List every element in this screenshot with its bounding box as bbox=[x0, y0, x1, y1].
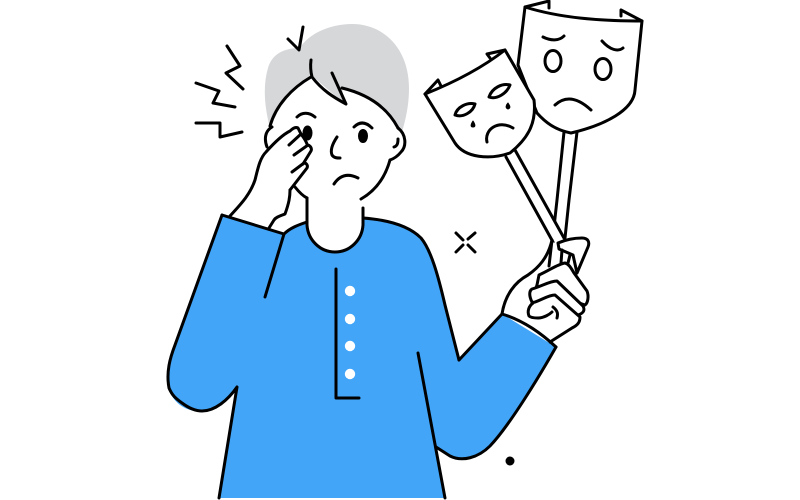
right cuff bbox=[502, 314, 556, 347]
small mask stick lines bbox=[506, 150, 564, 242]
neck and face bbox=[262, 60, 405, 225]
small eye left bbox=[455, 104, 475, 116]
button 1 bbox=[345, 286, 355, 296]
small mask bbox=[425, 50, 534, 157]
ring finger bbox=[290, 163, 307, 190]
button 2 bbox=[345, 314, 355, 324]
mouth bbox=[334, 175, 358, 184]
big mask stick bbox=[550, 132, 577, 263]
shirt outline bbox=[168, 215, 556, 498]
buttons bbox=[345, 286, 355, 379]
hand on face bbox=[230, 127, 312, 229]
shirt bbox=[168, 215, 556, 498]
right arm side fold bbox=[418, 353, 445, 498]
top finger bbox=[536, 263, 588, 305]
right arm bbox=[436, 314, 556, 459]
hand holding sticks bbox=[502, 238, 590, 343]
sparkle bbox=[456, 233, 475, 252]
hair bbox=[265, 24, 409, 132]
third finger and palm edge bbox=[532, 295, 580, 342]
mask mouth bbox=[555, 99, 591, 110]
head outline right bbox=[342, 88, 398, 128]
right eye bbox=[360, 130, 366, 142]
second finger bbox=[530, 281, 584, 315]
bottom finger bbox=[528, 303, 552, 318]
left eye bbox=[304, 127, 311, 139]
inner ear bbox=[394, 139, 398, 147]
back of hand bbox=[230, 128, 301, 216]
dot bbox=[506, 456, 514, 466]
small eye right bbox=[489, 85, 510, 98]
pain mark middle bbox=[196, 83, 235, 107]
big mask bbox=[518, 1, 642, 133]
cheek bbox=[295, 187, 307, 198]
left shoulder bbox=[284, 222, 307, 234]
right ear bbox=[390, 128, 405, 160]
nose bbox=[331, 137, 340, 158]
back of right hand bbox=[502, 240, 552, 314]
jaw bbox=[361, 160, 390, 199]
tear right bbox=[506, 103, 510, 109]
eye left bbox=[545, 50, 561, 72]
left sleeve and body bbox=[168, 215, 237, 498]
mask shape bbox=[518, 7, 642, 133]
palm bbox=[502, 240, 590, 343]
neckline bbox=[307, 198, 363, 252]
index finger bbox=[294, 145, 311, 164]
small mask shape bbox=[425, 50, 534, 157]
placket bbox=[336, 269, 359, 398]
left cuff bbox=[222, 215, 284, 297]
head outline left bbox=[270, 77, 311, 126]
pain mark bottom bbox=[196, 123, 242, 137]
button 4 bbox=[345, 369, 355, 379]
button 3 bbox=[345, 341, 355, 351]
left brow bbox=[297, 113, 315, 117]
pain mark top bbox=[226, 46, 243, 89]
crease bbox=[553, 307, 558, 318]
eye right bbox=[595, 58, 611, 80]
small mask stick bbox=[506, 150, 564, 242]
fringe bbox=[311, 60, 346, 104]
hand fill bbox=[230, 127, 312, 229]
brow left bbox=[543, 36, 564, 40]
face skin bbox=[262, 77, 405, 225]
brow right bbox=[602, 41, 623, 50]
fingertip joint bbox=[301, 134, 307, 144]
tabs bbox=[525, 1, 642, 21]
right shoulder and body bbox=[363, 218, 459, 360]
thumb bbox=[558, 238, 589, 273]
small mouth bbox=[487, 125, 513, 142]
left ear bbox=[265, 127, 272, 147]
hair tick bbox=[288, 27, 303, 50]
tear left bbox=[471, 121, 475, 127]
stick in hand bbox=[561, 250, 570, 263]
wrist bbox=[269, 190, 290, 228]
right brow bbox=[354, 123, 372, 128]
small tabs bbox=[425, 50, 505, 94]
